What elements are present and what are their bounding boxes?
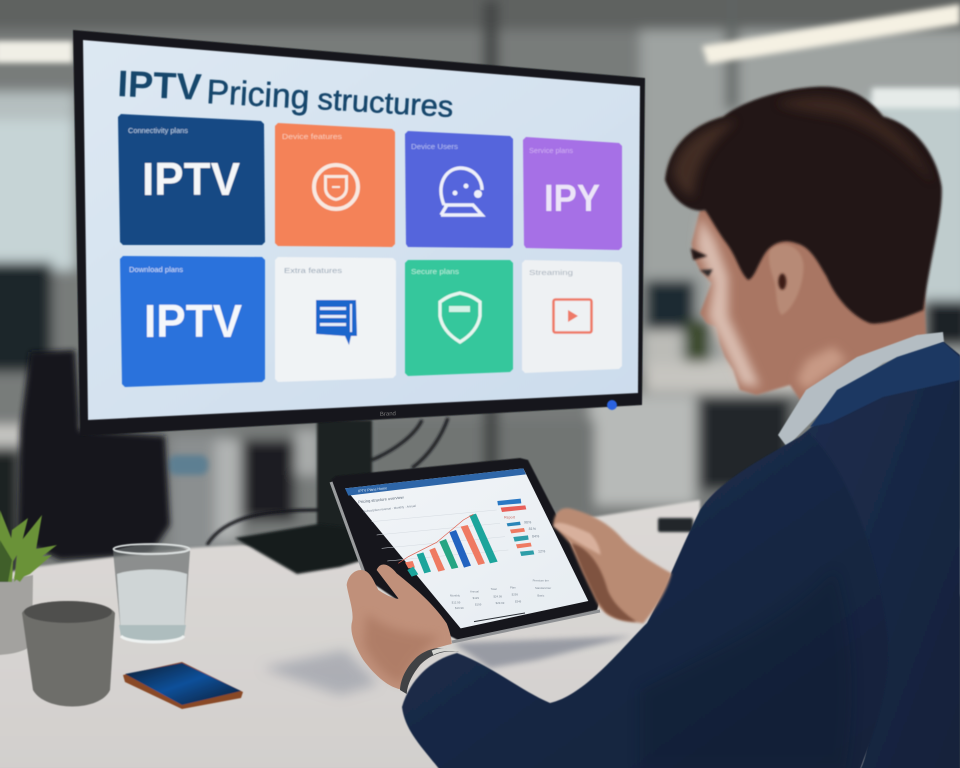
right hand back [553,508,672,623]
trend line [398,514,473,563]
hair highlight crown [777,97,933,183]
mug [22,601,115,706]
table text: Standard tier [535,586,551,590]
side bars [497,499,521,505]
screen title [117,63,454,124]
card: orange badge [275,123,395,247]
card: indigo icon: Device Users [411,142,458,151]
smartphone [123,662,243,709]
card: white play icon [522,260,622,373]
tablet edge [331,482,398,608]
chart bars [405,561,415,568]
hair [665,87,942,324]
left hand shade [363,613,440,683]
far window light [872,88,960,108]
chair back [862,595,960,768]
wristwatch [400,648,459,694]
table text: $12.99 [452,600,461,604]
card: white document icon [275,257,396,382]
monitor base over desk [235,524,387,574]
screen title: structures [317,83,454,124]
tablet top bar [345,468,526,496]
card: green shield [405,260,513,376]
card: bright blue IPTV [120,256,265,387]
card: purple IPTV: Service plans [529,146,573,155]
desk [0,500,960,768]
monitor screen [83,40,640,420]
card: white document icon: Extra features [284,268,343,275]
table text: Annual [470,589,479,593]
ceiling light strip left [0,41,73,63]
table text: $129 [473,596,479,600]
tablet screen: Subscription revenue · Monthly · Annual [363,504,416,513]
neck highlight [797,347,847,390]
monitor [73,30,645,436]
table text: Monthly [450,594,460,598]
card: bright blue IPTV: Download plans [129,265,183,274]
tablet screen: IPTV Plans Home [358,486,387,493]
card: purple IPTV: IPY [544,178,600,220]
side values: 64% [532,535,540,539]
table text: Plan [510,585,516,589]
desk shadow under tablet [453,636,632,668]
table text: $199 [475,603,482,607]
side values: Report [504,515,515,519]
tablet screen [345,468,588,628]
eyebrow [691,248,707,260]
sleeve fold shadow [640,570,852,768]
pot [0,575,33,655]
face highlight [697,217,760,387]
tablet body [331,458,600,641]
head and hair [665,87,942,407]
screen title: Pricing [206,73,311,117]
person [331,87,960,768]
card: orange badge: Device features [282,132,342,141]
card: purple IPTV [523,137,622,250]
side values: 81% [529,527,537,531]
jacket sleeve [402,432,888,768]
table text: Basic [537,593,545,597]
eye [700,269,713,277]
screen title: IPTV [117,63,203,108]
monitor brand: Brand [380,411,396,418]
face and neck [692,203,927,407]
hands [347,508,672,694]
table text: $19.99 [455,606,464,610]
card: white play icon: Streaming [529,270,573,277]
monitor status light [607,400,617,410]
hair highlight [673,120,737,197]
tablet screen: Pricing structure overview [358,495,404,504]
table text: $29.99 [496,601,505,605]
left hand [347,564,452,689]
monitor bezel [73,30,645,436]
table text: Total [491,587,497,591]
side values: 96% [524,520,532,524]
side values: 12% [538,549,546,553]
background office chair [18,350,170,560]
card: indigo icon [405,131,513,248]
ear inner [778,274,786,290]
tablet [331,458,600,642]
plant [0,510,57,655]
card: dark blue IPTV [118,114,265,245]
ear [769,245,803,315]
table text [450,579,551,610]
card: dark blue IPTV: IPTV [142,153,240,205]
card: green shield: Secure plans [411,267,459,276]
table text: $299 [512,593,518,597]
shirt collar [778,332,944,447]
jacket torso [800,342,960,768]
chart grid [372,510,508,561]
watch highlight [432,648,459,655]
ceiling light strip right [702,4,960,64]
right fingertip [553,523,601,555]
water glass [113,544,190,642]
side values [504,515,546,553]
table text: $349 [515,599,522,603]
card: dark blue IPTV: Connectivity plans [128,126,188,135]
table text: $24.99 [493,595,502,599]
right palm shadow [572,543,637,622]
monitor stand [207,418,448,545]
leaves [0,510,57,582]
card: bright blue IPTV: IPTV [144,295,242,347]
screen content [117,63,622,387]
table text: Premium tier [533,579,549,583]
home indicator [474,613,525,622]
desk object dark [658,518,693,532]
blurred blue reflection [168,455,208,475]
desk shadow left of hand [262,650,378,695]
jacket lapel [810,342,960,427]
